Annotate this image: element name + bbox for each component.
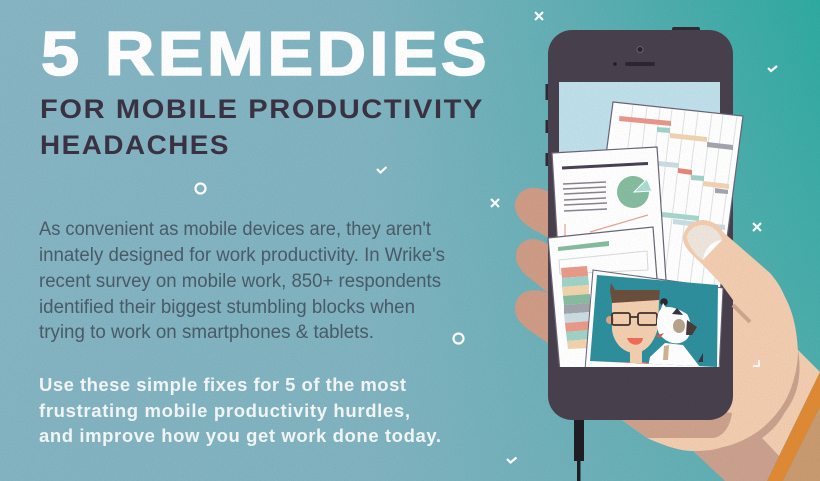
hand: palm: [622, 300, 798, 451]
call to action: and improve how you get work done today.: [39, 425, 441, 446]
photo of man and dog: [585, 270, 723, 372]
corner mark: [753, 360, 759, 366]
phone camera and speaker: [613, 46, 655, 66]
thumb crease: [733, 305, 750, 322]
hand: forearm and sleeve: [693, 350, 820, 481]
document: pie chart report: [552, 147, 666, 285]
call to action: Use these simple fixes for 5 of the most: [39, 374, 406, 395]
cable: [574, 415, 584, 481]
intro paragraph: As convenient as mobile devices are, they aren't: [39, 219, 432, 240]
hand: back fingers: [515, 188, 552, 346]
decorative marks: crosses, checks, rings: [196, 12, 777, 462]
call to action: [39, 374, 441, 446]
man: [606, 283, 660, 367]
title: 5 REMEDIES: [41, 20, 490, 89]
dog: [648, 298, 703, 367]
pie chart: [617, 176, 652, 208]
thumbnail: [687, 225, 722, 260]
subtitle: [40, 94, 484, 160]
subtitle: FOR MOBILE PRODUCTIVITY: [40, 94, 484, 124]
intro paragraph: innately designed for work productivity. In Wrike's: [39, 245, 445, 266]
intro paragraph: [39, 219, 445, 343]
call to action: frustrating mobile productivity hurdles,: [39, 400, 410, 421]
phone body: [546, 27, 733, 420]
thumb: [683, 220, 798, 385]
subtitle: HEADACHES: [40, 130, 230, 160]
intro paragraph: identified their biggest stumbling blocks when: [39, 297, 415, 318]
intro paragraph: trying to work on smartphones & tablets.: [39, 322, 374, 343]
phone screen: [559, 82, 720, 367]
document: table report: [548, 227, 664, 372]
document: gantt chart: [583, 102, 743, 330]
intro paragraph: recent survey on mobile work, 850+ respondents: [39, 271, 441, 292]
